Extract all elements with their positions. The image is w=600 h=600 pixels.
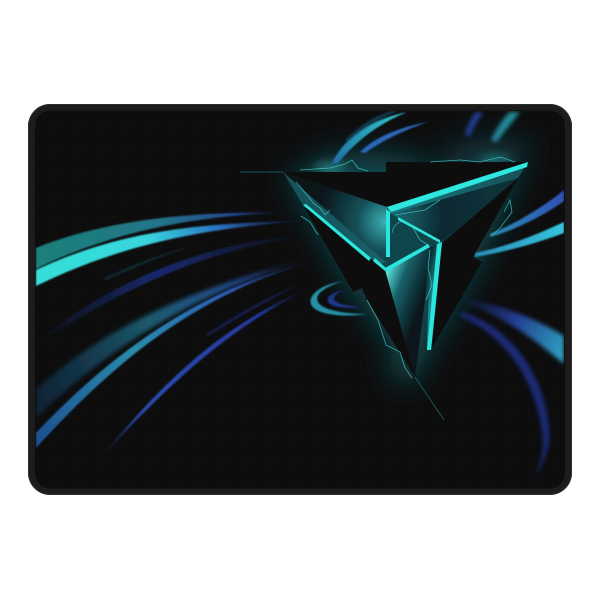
- swoosh group: left streaks: [36, 213, 315, 462]
- glow behind emblem: [285, 138, 535, 385]
- swoosh: ring: [311, 281, 368, 316]
- emblem: [240, 157, 528, 420]
- emblem: thin light lines: [240, 172, 444, 420]
- emblem: top band: [387, 162, 528, 214]
- emblem: left black facet: [303, 205, 415, 377]
- emblem: bright top edge: [387, 162, 528, 212]
- swoosh: top right streaks: [465, 112, 520, 142]
- mat body: [28, 104, 572, 495]
- swoosh: lower right arcs: [460, 297, 564, 476]
- emblem: left strip: [283, 172, 386, 266]
- emblem: right black facet: [432, 178, 518, 348]
- printed artwork: [36, 111, 564, 476]
- emblem: bottom lit facet: [385, 247, 430, 377]
- swoosh: top arcs: [332, 111, 428, 163]
- emblem: right lit band: [427, 242, 442, 350]
- emblem: left lit facet: [283, 172, 387, 263]
- emblem: bright edges: [303, 204, 442, 350]
- emblem: centre facet: [390, 178, 518, 242]
- emblem: top black facet: [283, 162, 528, 207]
- mouse pad illustration: [28, 104, 572, 495]
- emblem: lightning: [296, 157, 515, 378]
- swoosh: right streaks: [475, 190, 564, 257]
- glow spots: [314, 156, 511, 172]
